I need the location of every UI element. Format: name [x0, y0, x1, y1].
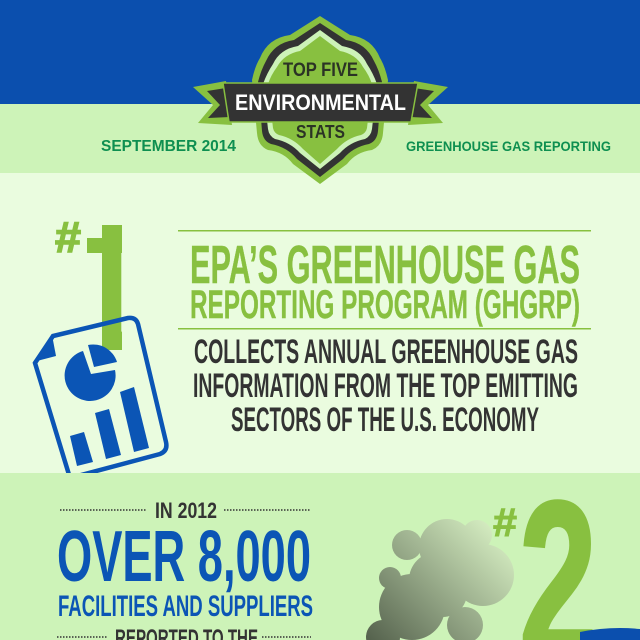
blue shape — [580, 628, 640, 640]
badge ribbon tails — [193, 81, 448, 125]
badge text: stats: STATS — [296, 122, 345, 142]
hash 1: # — [55, 213, 81, 262]
over 8,000: OVER 8,000 — [57, 517, 311, 597]
header badge — [193, 16, 448, 184]
in 2012: IN 2012 — [155, 498, 217, 523]
bar chart — [70, 387, 149, 466]
pie chart — [65, 344, 117, 401]
hash 2: # — [493, 501, 517, 545]
badge text: top five: TOP FIVE — [283, 59, 358, 81]
date: SEPTEMBER 2014 — [101, 138, 236, 155]
document outline — [35, 318, 166, 478]
body text 1 — [193, 333, 578, 439]
badge banner — [223, 83, 418, 122]
facilities and suppliers: FACILITIES AND SUPPLIERS — [58, 590, 313, 623]
stat block 2 — [57, 498, 313, 640]
numeral 1 — [87, 225, 122, 350]
dotted rules — [57, 510, 311, 637]
subject: GREENHOUSE GAS REPORTING — [406, 138, 611, 154]
icon: smoke cloud — [366, 519, 514, 640]
badge shield — [252, 16, 388, 184]
document fold — [33, 340, 56, 362]
badge text: environmental: ENVIRONMENTAL — [235, 90, 406, 115]
divider lines — [178, 230, 591, 330]
icon: report document — [33, 318, 166, 478]
heading 1 — [190, 235, 580, 327]
numeral 1: 1 — [50, 188, 157, 389]
